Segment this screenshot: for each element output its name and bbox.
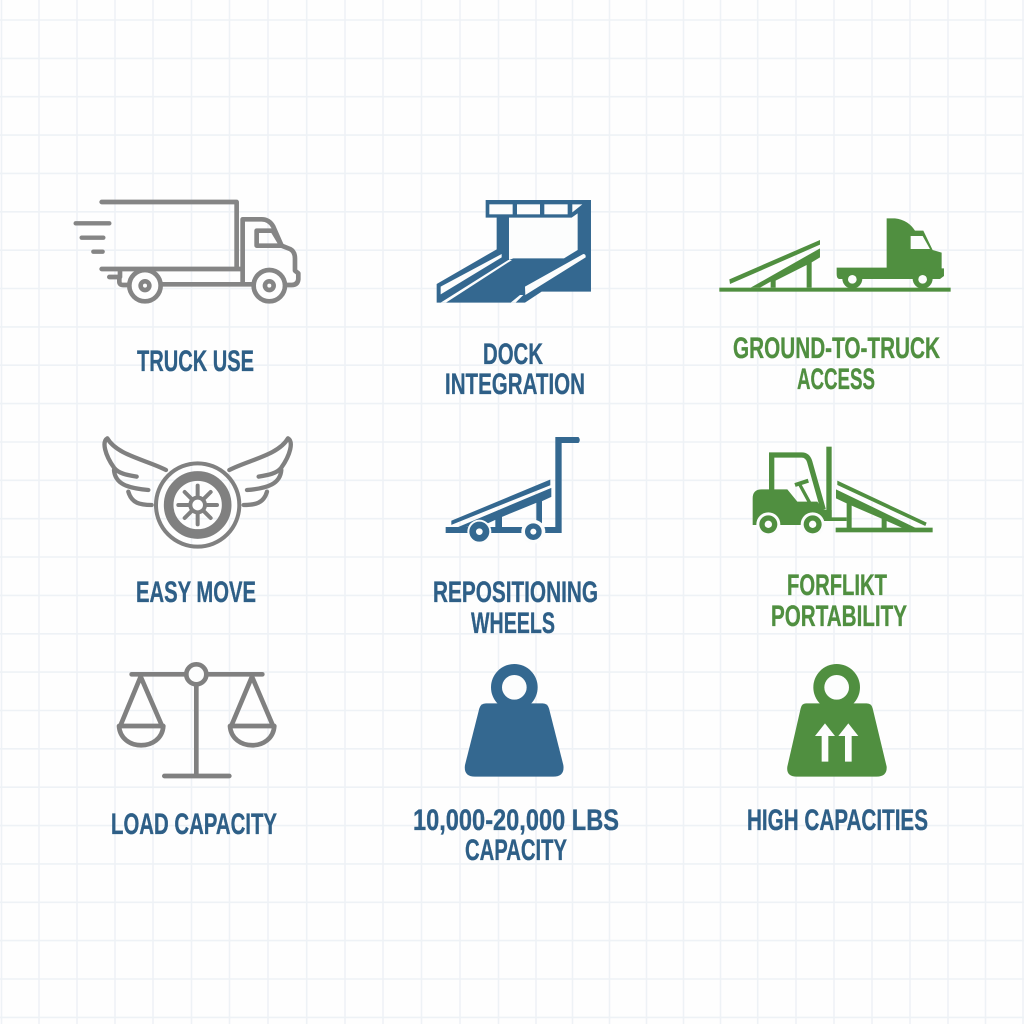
label: forklift portability: FORFLIKT xyxy=(787,569,887,602)
label: load capacity: LOAD CAPACITY xyxy=(111,808,277,841)
label: truck use: TRUCK USE xyxy=(137,345,254,378)
icon: green weight with arrows xyxy=(787,664,887,777)
icon: dock ramp xyxy=(437,200,591,303)
label: dock integration: INTEGRATION xyxy=(445,368,585,401)
label: forklift portability: PORTABILITY xyxy=(771,600,907,633)
label: dock integration: DOCK xyxy=(483,338,543,371)
label: 10,000-20,000 lbs capacity xyxy=(413,804,619,867)
icon: blue weight xyxy=(465,664,564,777)
label: repositioning wheels: WHEELS xyxy=(471,607,555,640)
label: forklift portability xyxy=(771,569,907,633)
label: 10,000-20,000 lbs capacity: 10,000-20,000 LBS xyxy=(413,804,619,837)
icon: ground ramp and truck xyxy=(719,218,951,292)
icon: moving truck xyxy=(76,202,298,301)
label: ground-to-truck access: ACCESS xyxy=(797,363,875,396)
label: ground-to-truck access: GROUND-TO-TRUCK xyxy=(733,332,940,365)
label: repositioning wheels: REPOSITIONING xyxy=(433,576,598,609)
icon: ramp on repositioning wheels xyxy=(446,437,579,544)
label: repositioning wheels xyxy=(433,576,598,640)
icon: balance scale xyxy=(119,664,274,776)
label: ground-to-truck access xyxy=(733,332,940,396)
label: easy move: EASY MOVE xyxy=(136,576,256,609)
icon: forklift with ramp xyxy=(753,447,933,536)
icon: winged wheel xyxy=(105,438,291,547)
label: 10,000-20,000 lbs capacity: CAPACITY xyxy=(465,834,567,867)
label: high capacities: HIGH CAPACITIES xyxy=(747,804,928,837)
label: dock integration xyxy=(445,338,585,401)
